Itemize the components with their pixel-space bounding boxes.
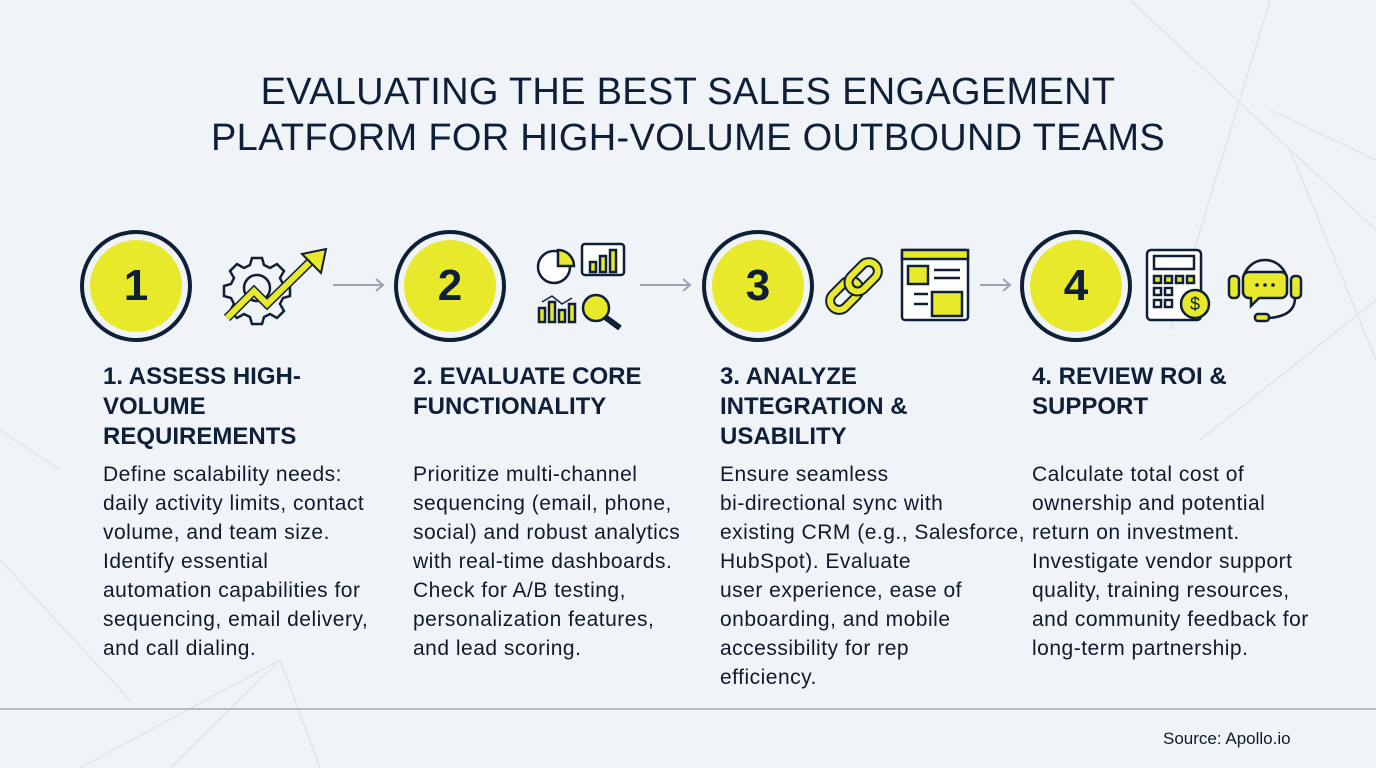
body 1: automation capabilities for xyxy=(103,579,360,602)
heading 1 xyxy=(103,363,301,450)
heading 4: 4. REVIEW ROI & xyxy=(1032,363,1227,390)
body 4 xyxy=(1032,463,1309,660)
body 2: and lead scoring. xyxy=(413,637,581,660)
heading 3: INTEGRATION & xyxy=(720,393,908,420)
body 2 xyxy=(413,463,680,660)
body 3: existing CRM (e.g., Salesforce, xyxy=(720,521,1025,544)
arrow 3 xyxy=(980,278,1012,292)
step 1 circle xyxy=(80,230,192,342)
step 4 circle: 4 xyxy=(1064,261,1088,310)
body 1: Define scalability needs: xyxy=(103,463,342,486)
body 3: accessibility for rep xyxy=(720,637,909,660)
step 3 circle: 3 xyxy=(746,261,770,310)
body 4: return on investment. xyxy=(1032,521,1240,544)
body 4: ownership and potential xyxy=(1032,492,1265,515)
body 3: onboarding, and mobile xyxy=(720,608,950,631)
body 4: long-term partnership. xyxy=(1032,637,1248,660)
body 2: sequencing (email, phone, xyxy=(413,492,672,515)
heading 4 xyxy=(1032,363,1227,420)
body 1: Identify essential xyxy=(103,550,268,573)
step 4 circle xyxy=(1020,230,1132,342)
icon: calculator and headset xyxy=(1146,248,1302,322)
heading 1: 1. ASSESS HIGH- xyxy=(103,363,301,390)
body 1: sequencing, email delivery, xyxy=(103,608,368,631)
heading 3: USABILITY xyxy=(720,423,847,450)
step 2 circle: 2 xyxy=(438,261,462,310)
body 1: daily activity limits, contact xyxy=(103,492,364,515)
body 2: Prioritize multi-channel xyxy=(413,463,637,486)
body 3: bi-directional sync with xyxy=(720,492,943,515)
body 1 xyxy=(103,463,368,660)
body 3: Ensure seamless xyxy=(720,463,889,486)
body 2: personalization features, xyxy=(413,608,654,631)
source: Source: Apollo.io xyxy=(1163,729,1291,748)
heading 2 xyxy=(413,363,641,420)
body 2: social) and robust analytics xyxy=(413,521,680,544)
step 3 circle xyxy=(702,230,814,342)
body 2: with real-time dashboards. xyxy=(413,550,672,573)
heading 3: 3. ANALYZE xyxy=(720,363,857,390)
body 4: quality, training resources, xyxy=(1032,579,1290,602)
title: EVALUATING THE BEST SALES ENGAGEMENT xyxy=(261,71,1115,113)
body 1: and call dialing. xyxy=(103,637,256,660)
heading 1: REQUIREMENTS xyxy=(103,423,296,450)
icon: gear with arrow xyxy=(222,248,328,326)
step 1 circle: 1 xyxy=(124,261,148,310)
heading 3 xyxy=(720,363,908,450)
heading 2: FUNCTIONALITY xyxy=(413,393,606,420)
body 2: Check for A/B testing, xyxy=(413,579,626,602)
body 4: Investigate vendor support xyxy=(1032,550,1292,573)
title: PLATFORM FOR HIGH-VOLUME OUTBOUND TEAMS xyxy=(211,117,1165,159)
arrow 1 xyxy=(333,278,384,292)
body 3: user experience, ease of xyxy=(720,579,962,602)
body 4: and community feedback for xyxy=(1032,608,1309,631)
icon: chain link and window xyxy=(825,248,970,322)
body 4: Calculate total cost of xyxy=(1032,463,1244,486)
body 1: volume, and team size. xyxy=(103,521,330,544)
icon: calculator and headset: $ xyxy=(1190,294,1200,314)
heading 2: 2. EVALUATE CORE xyxy=(413,363,641,390)
body 3: efficiency. xyxy=(720,666,817,689)
heading 4: SUPPORT xyxy=(1032,393,1148,420)
title xyxy=(211,71,1165,159)
heading 1: VOLUME xyxy=(103,393,206,420)
body 3: HubSpot). Evaluate xyxy=(720,550,911,573)
arrow 2 xyxy=(640,278,692,292)
body 3 xyxy=(720,463,1025,689)
step 2 circle xyxy=(394,230,506,342)
icon: charts and magnifier xyxy=(536,242,626,330)
